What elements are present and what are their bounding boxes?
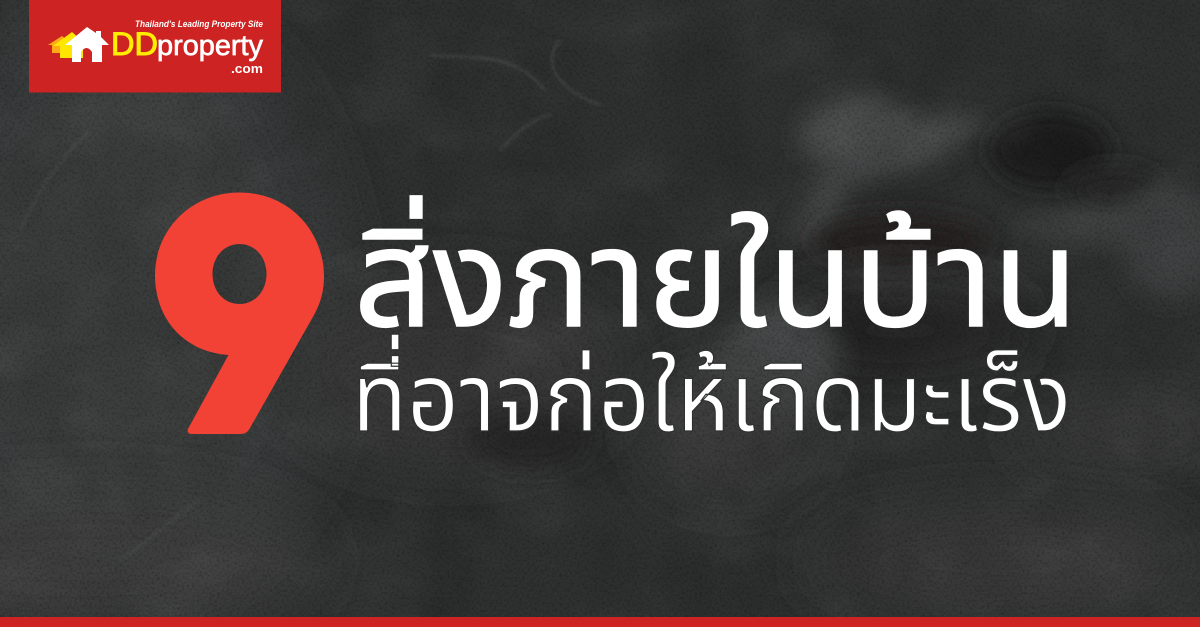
logo: DDproperty: property <box>157 30 263 62</box>
icon: houses <box>48 27 109 62</box>
heading line 1: สิ่งภายในบ้าน <box>354 195 1078 356</box>
numeral 9 <box>155 192 324 434</box>
logo: DDproperty <box>29 0 281 92</box>
heading line 2: ที่อาจก่อให้เกิดมะเร็ง <box>352 334 1071 452</box>
logo .com: .com <box>231 62 263 76</box>
logo tagline: Thailand's Leading Property Site <box>135 19 263 29</box>
logo wordmark: DD <box>111 26 158 62</box>
bottom red bar <box>0 617 1200 627</box>
